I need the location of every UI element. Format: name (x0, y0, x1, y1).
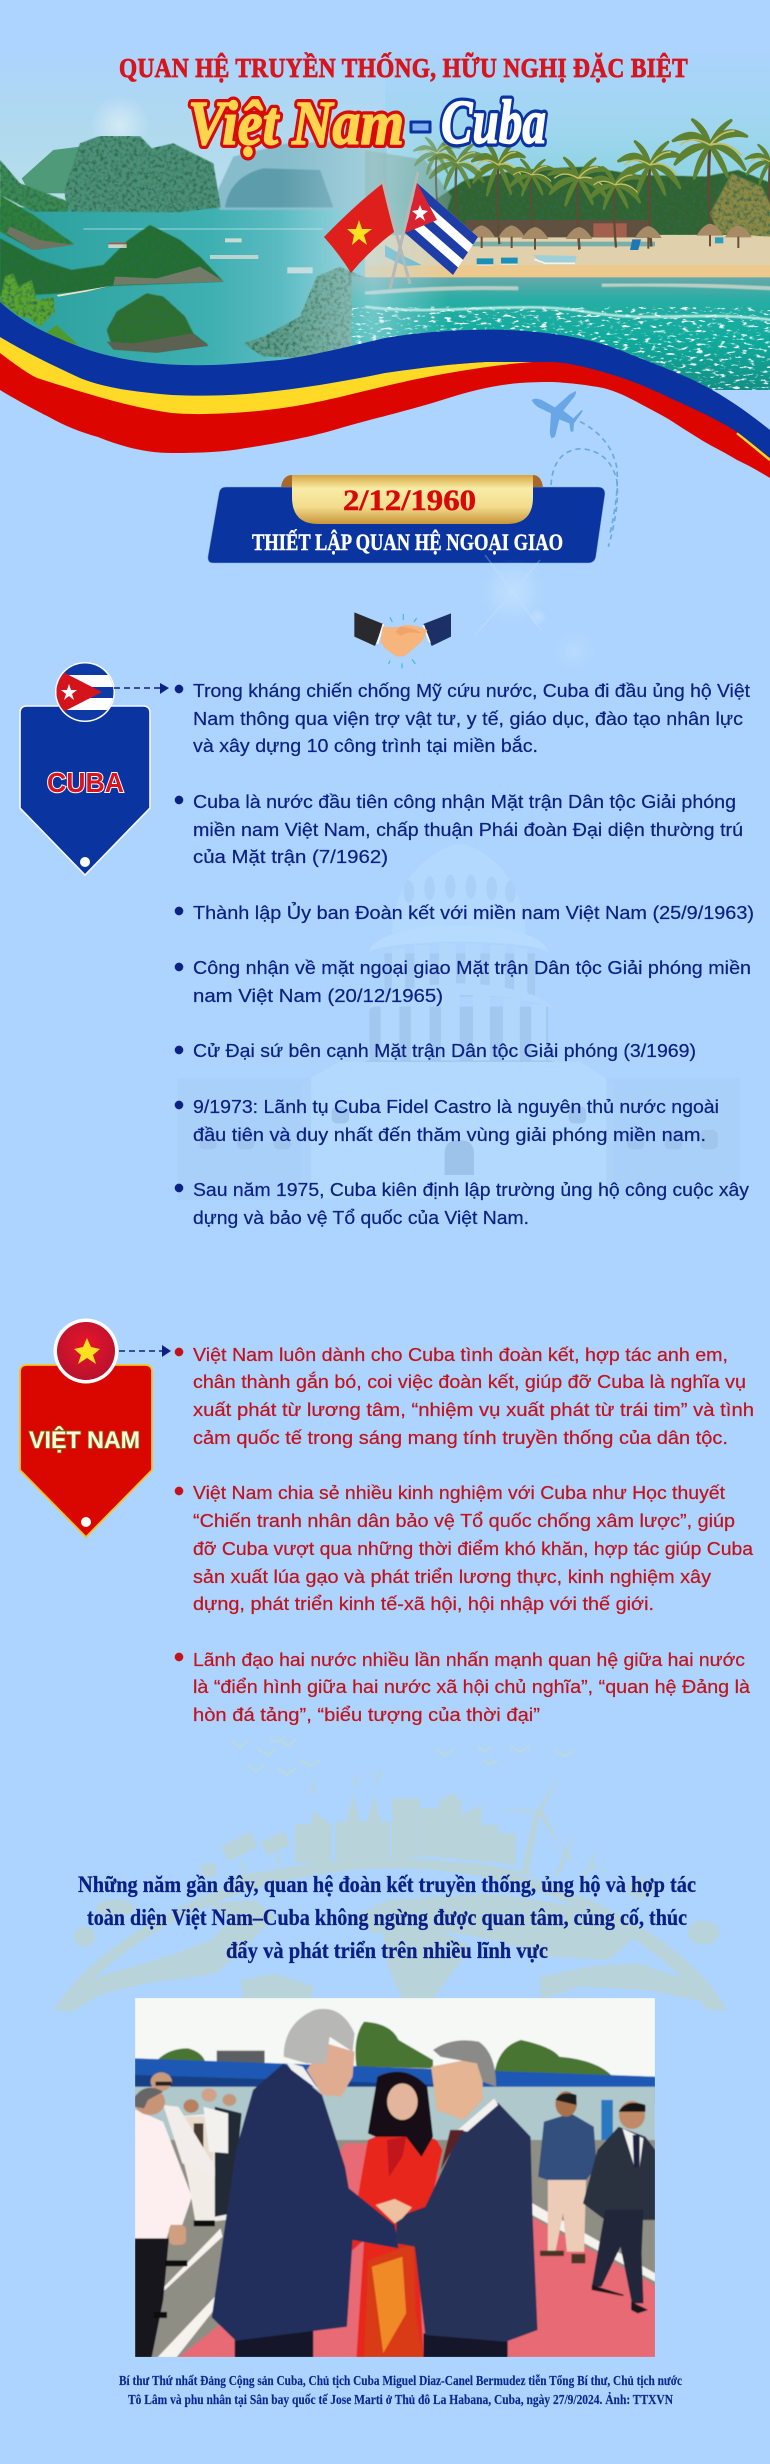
point: solidarity (175, 1344, 754, 1448)
point: diplomatic recognition: Công nhận về mặt ngoại giao Mặt trận Dân tộc Giải phóng miền (193, 957, 751, 978)
pennant label: VIỆT NAM: VIỆT NAM (29, 1426, 140, 1454)
point: leaders' statements: hòn đá tảng”, “biểu tượng của thời đại” (193, 1704, 540, 1725)
sky (0, 90, 770, 235)
ribbon: red (0, 345, 770, 478)
Cuban president (212, 2009, 399, 2357)
ribbon: yellow (0, 337, 552, 414)
point: shared experience: dựng, phát triển kinh tế-xã hội, hội nhập với thế giới. (193, 1593, 654, 1614)
subtitle: Việt Nam - Cuba (188, 89, 546, 158)
arrow: Cuba section (114, 683, 169, 694)
icon: Cuba flag medallion (55, 662, 115, 722)
To Lam (396, 2040, 537, 2357)
icon: handshake (354, 612, 451, 668)
icon: airplane (532, 391, 583, 438)
man in blue shirt (538, 2091, 597, 2263)
point: diplomatic recognition (175, 957, 751, 1006)
pennant label: CUBA: CUBA (47, 767, 124, 798)
tourist boats (108, 238, 313, 273)
banner heading: THIẾT LẬP QUAN HỆ NGOẠI GIAO (252, 529, 563, 555)
point: Fidel Castro visit: 9/1973: Lãnh tụ Cuba Fidel Castro là nguyên thủ nước ngoài (193, 1096, 719, 1117)
point: solidarity committee: Thành lập Ủy ban Đoàn kết với miền nam Việt Nam (25/9/1963) (193, 902, 754, 923)
dashed flight path (551, 422, 617, 547)
point: solidarity: xuất phát từ lương tâm, “nhiệm vụ xuất phát từ trái tim” và tình (193, 1399, 754, 1420)
man in suit (583, 2101, 655, 2313)
point: leaders' statements: Lãnh đạo hai nước nhiều lần nhấn mạnh quan hệ giữa hai nước (193, 1649, 745, 1670)
date: 2/12/1960 (343, 484, 476, 517)
subtitle: Việt Nam - Cuba: Việt Nam (188, 90, 404, 158)
point: leaders' statements: là “điển hình giữa hai nước xã hội chủ nghĩa”, “quan hệ Đảng là (193, 1676, 751, 1697)
globe and green city watermark (54, 1770, 727, 2013)
point: ambassador: Cử Đại sứ bên cạnh Mặt trận Dân tộc Giải phóng (3/1969) (193, 1040, 696, 1061)
point: after 1975: dựng và bảo vệ Tổ quốc của Việt Nam. (193, 1207, 529, 1228)
point: wartime support: và xây dựng 10 công trình tại miền bắc. (193, 735, 538, 756)
icon: Cuba flag (405, 183, 478, 275)
photo: leaders at Jose Marti airport (134, 1998, 655, 2357)
city skyline (201, 1770, 611, 1877)
flagpoles (382, 172, 418, 289)
capitol watermark (178, 843, 740, 1200)
point: after 1975: Sau năm 1975, Cuba kiên định lập trường ủng hộ công cuộc xây (193, 1179, 750, 1200)
point: shared experience: sản xuất lúa gạo và phát triển lương thực, kinh nghiệm xây (193, 1566, 712, 1587)
globe outline and continents (54, 1858, 727, 2013)
bystanders left (134, 2072, 242, 2357)
banner: date of diplomatic relations (208, 475, 605, 563)
beach huts and loungers (385, 224, 752, 266)
point: solidarity: chân thành gắn bó, coi việc đoàn kết, giúp đỡ Cuba là nghĩa vụ (193, 1371, 746, 1392)
point: wartime support: Nam thông qua viện trợ vật tư, y tế, giáo dục, đào tạo nhân lực (193, 708, 743, 729)
point: leaders' statements (175, 1649, 751, 1725)
pennant: Việt Nam (20, 1365, 152, 1537)
point: shared experience: đỡ Cuba vượt qua những thời điểm khó khăn, hợp tác giúp Cuba (193, 1538, 754, 1559)
section: Cuba (20, 662, 754, 1228)
hero illustration (0, 90, 770, 390)
trees (74, 1878, 719, 1947)
pennant hole (81, 1517, 91, 1527)
point: after 1975 (175, 1179, 750, 1228)
section: Việt Nam (20, 1318, 754, 1725)
Cuba beach scene (352, 120, 770, 390)
photo caption (119, 2373, 682, 2407)
pennant hole (80, 857, 90, 867)
banner blue plate (208, 487, 605, 563)
point: Fidel Castro visit: đầu tiên và duy nhất đến thăm vùng giải phóng miền nam. (193, 1124, 706, 1145)
gold scroll (292, 475, 533, 524)
point: first to recognize the Front: của Mặt trận (7/1962) (193, 846, 388, 867)
point: wartime support: Trong kháng chiến chống Mỹ cứu nước, Cuba đi đầu ủng hộ Việt (193, 680, 751, 701)
point: diplomatic recognition: nam Việt Nam (20/12/1965) (193, 985, 443, 1006)
point: Fidel Castro visit (175, 1096, 719, 1145)
icon: Vietnam flag (324, 184, 394, 273)
point: first to recognize the Front: miền nam Việt Nam, chấp thuận Phái đoàn Đại diện thường trú (193, 819, 743, 840)
photo caption: Tô Lâm và phu nhân tại Sân bay quốc tế Jose Marti ở Thủ đô La Habana, Cuba, ngày 27/9/2024. Ảnh: TTXVN (128, 2391, 673, 2407)
point: shared experience: “Chiến tranh nhân dân bảo vệ Tổ quốc chống xâm lược”, giúp (193, 1510, 735, 1531)
Ha Long bay scene (0, 136, 387, 384)
scroll tabs (281, 475, 543, 487)
point: wartime support (175, 680, 751, 756)
sparkles (475, 555, 596, 673)
point: solidarity: cảm quốc tế trong sáng mang tính truyền thống của dân tộc. (193, 1427, 728, 1448)
point: solidarity: Việt Nam luôn dành cho Cuba tình đoàn kết, hợp tác anh em, (193, 1344, 728, 1365)
subtitle: Việt Nam - Cuba: Cuba (441, 89, 546, 157)
subtitle: Việt Nam - Cuba: Việt Nam (188, 90, 404, 158)
closing statement (78, 1872, 696, 1964)
title: QUAN HỆ TRUYỀN THỐNG, HỮU NGHỊ ĐẶC BIỆT (119, 52, 688, 83)
handshake (376, 2199, 412, 2223)
misty blend between scenes (290, 130, 443, 379)
birds watermark (231, 1738, 575, 1775)
subtitle: Việt Nam - Cuba: Cuba (441, 89, 546, 157)
woman in red ao dai (349, 2072, 443, 2357)
closing statement: toàn diện Việt Nam–Cuba không ngừng được quan tâm, củng cố, thúc (87, 1905, 687, 1931)
icon: Vietnam flag medallion (54, 1318, 118, 1384)
point: first to recognize the Front: Cuba là nước đầu tiên công nhận Mặt trận Dân tộc Giải phóng (193, 791, 736, 812)
point: first to recognize the Front (175, 791, 743, 867)
pennant: Cuba (20, 706, 150, 875)
arrow: Việt Nam section (119, 1345, 171, 1357)
closing statement: đẩy và phát triển trên nhiều lĩnh vực (226, 1938, 548, 1964)
point: shared experience: Việt Nam chia sẻ nhiều kinh nghiệm với Cuba như Học thuyết (193, 1482, 726, 1503)
beach palms (414, 120, 770, 249)
point: shared experience (175, 1482, 754, 1614)
ribbon: blue (0, 302, 770, 458)
